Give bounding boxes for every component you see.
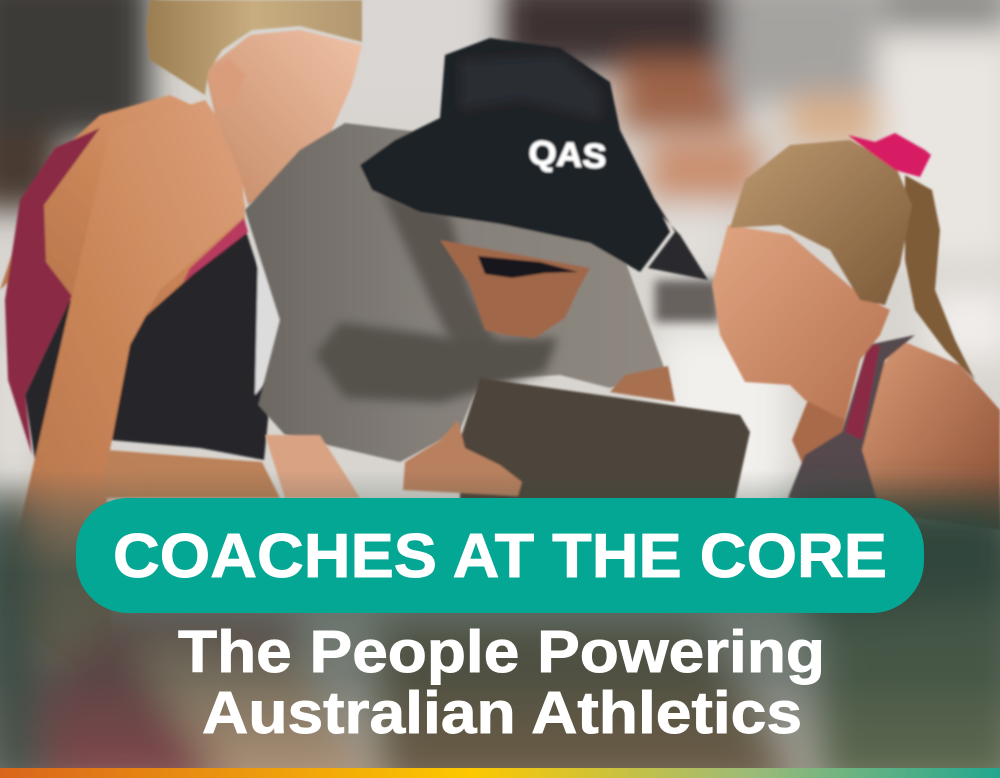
- gradient colour strip: [0, 768, 1000, 778]
- hair: [730, 140, 912, 305]
- shirt lettering band: [315, 322, 558, 403]
- ear: [210, 58, 245, 110]
- braid: [905, 175, 975, 380]
- subtitle: [178, 619, 825, 746]
- chest: [792, 400, 850, 470]
- hand: [403, 420, 522, 496]
- bucket hat: [360, 38, 670, 272]
- title pill: [76, 498, 924, 613]
- subtitle line 1: The People Powering: [178, 619, 825, 685]
- photo: coach: [245, 38, 708, 462]
- sunglasses: [478, 256, 578, 278]
- singlet: [788, 335, 915, 512]
- black crop top: [25, 228, 272, 480]
- hat logo: QAS: [528, 134, 607, 176]
- shoulder and arm: [860, 340, 1000, 530]
- subtitle line 2: Australian Athletics: [202, 680, 802, 746]
- tablet: [460, 378, 750, 500]
- maroon top: [5, 128, 100, 455]
- photo: athlete on left: [0, 0, 362, 670]
- hair: [146, 0, 362, 95]
- dark shadow behind coach: [610, 160, 708, 280]
- forearm: [610, 366, 675, 402]
- race bib: [255, 258, 283, 395]
- photo: blurred lower foreground: [0, 500, 1000, 778]
- dark green gradient overlay: [0, 470, 1000, 768]
- midriff: [100, 450, 280, 498]
- photo: tablet and hand: [265, 378, 750, 500]
- grey shirt: [245, 123, 665, 462]
- photo: athlete on right: [712, 133, 1000, 530]
- back and torso skin: [0, 95, 245, 330]
- shirt shadow: [380, 190, 500, 380]
- front arm: [5, 100, 245, 670]
- maroon strap: [845, 345, 880, 440]
- title text: COACHES AT THE CORE: [113, 522, 887, 591]
- neck and face: [205, 30, 362, 205]
- pill background: [76, 498, 924, 613]
- pink trim on top: [183, 218, 248, 282]
- pink bow: [848, 133, 931, 177]
- hat crown highlight: [460, 55, 600, 120]
- athlete wrist: [265, 435, 360, 498]
- neck and face: [440, 240, 590, 338]
- neck and face: [712, 225, 890, 420]
